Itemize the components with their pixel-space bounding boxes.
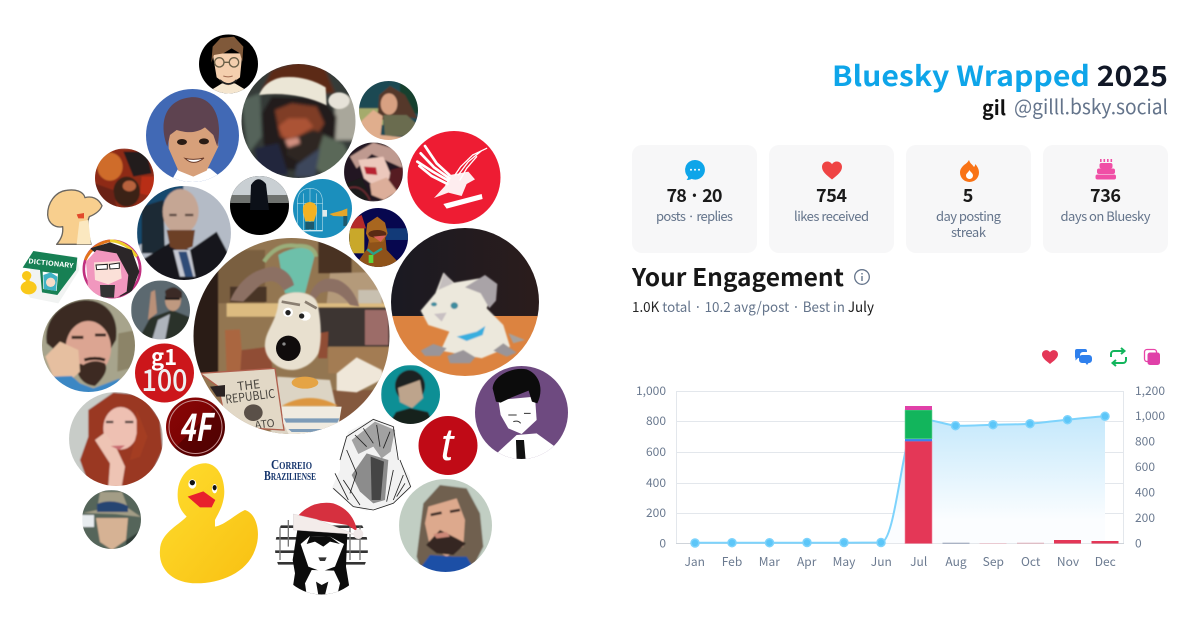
avatar: curly haired man: [40, 298, 137, 395]
book title text: THE: [236, 375, 261, 395]
avatar: tumblr t logo: t: [441, 419, 456, 470]
month labels: Apr: [797, 553, 817, 570]
avatar: Gromit reading The Republic: ATO: [254, 416, 276, 433]
avatar: manga man on purple: [474, 365, 570, 462]
icon: legend replies: [1075, 349, 1092, 365]
user handle: @gilll.bsky.social: [1014, 91, 1168, 120]
avatar: Gromit reading The Republic: REPUBLIC: [224, 385, 276, 408]
stat value: 5: [963, 182, 973, 208]
icon: speech bubble: [685, 160, 705, 180]
avatar: 4F logo: [166, 397, 225, 456]
stat value: 78 · 20: [666, 182, 722, 208]
right axis labels: 400: [1135, 484, 1155, 500]
avatar cluster: [21, 34, 570, 597]
avatar: g1 100 logo: 100: [142, 356, 188, 400]
avatar: silhouette against sky: [230, 176, 290, 236]
panel: posting streak: [906, 145, 1031, 253]
icon: cake: [1096, 159, 1116, 180]
avatar: man in sunglasses and suit: [131, 280, 192, 340]
heading: Your Engagement: Your Engagement: [631, 258, 844, 293]
month labels: Jul: [910, 553, 927, 570]
chart: engagement by month: [636, 382, 1165, 570]
month labels: Jan: [684, 553, 705, 570]
panel: days on Bluesky: [1043, 145, 1168, 253]
left axis labels: 400: [646, 474, 666, 491]
stat value: 754: [816, 182, 847, 208]
right axis labels: 600: [1135, 458, 1155, 475]
month labels: Sep: [983, 553, 1004, 570]
right axis labels: 200: [1135, 509, 1155, 526]
avatar: bald man in suit: [137, 185, 232, 282]
dictionary label: DICTIONARY: [28, 255, 74, 270]
logo: Correio Braziliense: Correio: [271, 458, 312, 473]
icon: legend quotes: [1144, 350, 1160, 365]
engagement summary: 1.0K total · 10.2 avg/post · Best in July: [632, 297, 875, 317]
month labels: Aug: [945, 553, 967, 570]
avatar: white kitten: [390, 227, 540, 379]
right axis labels: [1135, 382, 1165, 552]
avatar: cartoon man on blue: [146, 89, 240, 190]
avatar: 4F logo: 4F: [179, 397, 215, 452]
stat label: days on Bluesky: [1060, 206, 1151, 225]
left axis labels: 600: [646, 443, 666, 460]
month labels: Dec: [1095, 553, 1116, 570]
icon: flame: [960, 160, 979, 182]
avatar: Scooby-Doo: [349, 208, 409, 270]
month labels: Jun: [871, 553, 892, 570]
panel: posts and replies: [632, 145, 757, 253]
stacked bar: July: [905, 406, 932, 544]
logo: Correio Braziliense: [264, 458, 316, 484]
avatar: santa hat painting: [242, 64, 356, 178]
title: Bluesky Wrapped 2025: [832, 55, 1168, 95]
avatar: eagle logo on red: [408, 131, 500, 224]
avatar: g1 100 logo: g1: [151, 340, 177, 372]
icon: rubber duck: [160, 463, 258, 583]
avatar: g1 100 logo: [135, 340, 194, 402]
left axis labels: [636, 382, 666, 552]
right axis labels: 800: [1135, 432, 1155, 450]
avatar: pink haired anime girl: [82, 238, 142, 300]
avatar: redhead woman: [68, 392, 163, 488]
cumulative area: [881, 416, 1105, 544]
left axis labels: 200: [646, 504, 666, 521]
avatar: Gromit reading The Republic: [194, 238, 390, 434]
avatar: woman on teal: [381, 365, 441, 425]
grid and axes: [676, 391, 1124, 544]
user handle: gil: [982, 92, 1006, 121]
avatar: tumblr t logo: [418, 416, 478, 475]
avatar: santa hat manga girl: [273, 502, 370, 597]
avatar: lightbulb in a birdcage: [293, 179, 353, 239]
left axis labels: 1,000: [636, 382, 666, 399]
small bars: [942, 540, 1118, 544]
icon: legend reposts: [1111, 348, 1126, 366]
month labels: Oct: [1021, 553, 1041, 570]
avatar: woman on sofa: [359, 81, 418, 140]
stat label: day posting: [936, 206, 1002, 225]
stat label: posts · replies: [656, 206, 733, 225]
illustration: wolf sketch: [332, 418, 411, 511]
icon: legend likes: [1042, 350, 1058, 364]
stat value: 736: [1090, 182, 1121, 208]
avatar: woman with red lips: [343, 142, 403, 202]
right axis labels: 1,200: [1135, 382, 1165, 399]
stat label: likes received: [794, 206, 869, 225]
avatar: man in fedora: [82, 490, 142, 550]
panel: likes received: [769, 145, 894, 253]
icon: cartoon dog sticker: [48, 190, 102, 244]
avatar: cartoon man with glasses: [199, 34, 259, 97]
month labels: [684, 553, 1116, 570]
avatar: dictionary sticker: [21, 251, 79, 303]
right axis labels: 1,000: [1135, 407, 1165, 424]
avatar: man with long hair: [398, 478, 493, 573]
line markers: [691, 412, 1109, 547]
avatar: dark red blurred photo: [93, 148, 155, 208]
logo: Correio Braziliense: Braziliense: [264, 469, 316, 484]
left axis labels: 0: [659, 534, 666, 552]
month labels: May: [833, 553, 856, 570]
cumulative line: [695, 416, 1105, 543]
right axis labels: 0: [1135, 534, 1142, 552]
icon: heart: [822, 162, 842, 180]
month labels: Feb: [722, 553, 742, 570]
icon: info: [855, 270, 869, 284]
month labels: Nov: [1057, 553, 1080, 570]
legend icons: [1042, 348, 1160, 366]
left axis labels: 800: [646, 412, 666, 429]
month labels: Mar: [759, 553, 780, 570]
stat label line two: streak: [951, 222, 987, 241]
